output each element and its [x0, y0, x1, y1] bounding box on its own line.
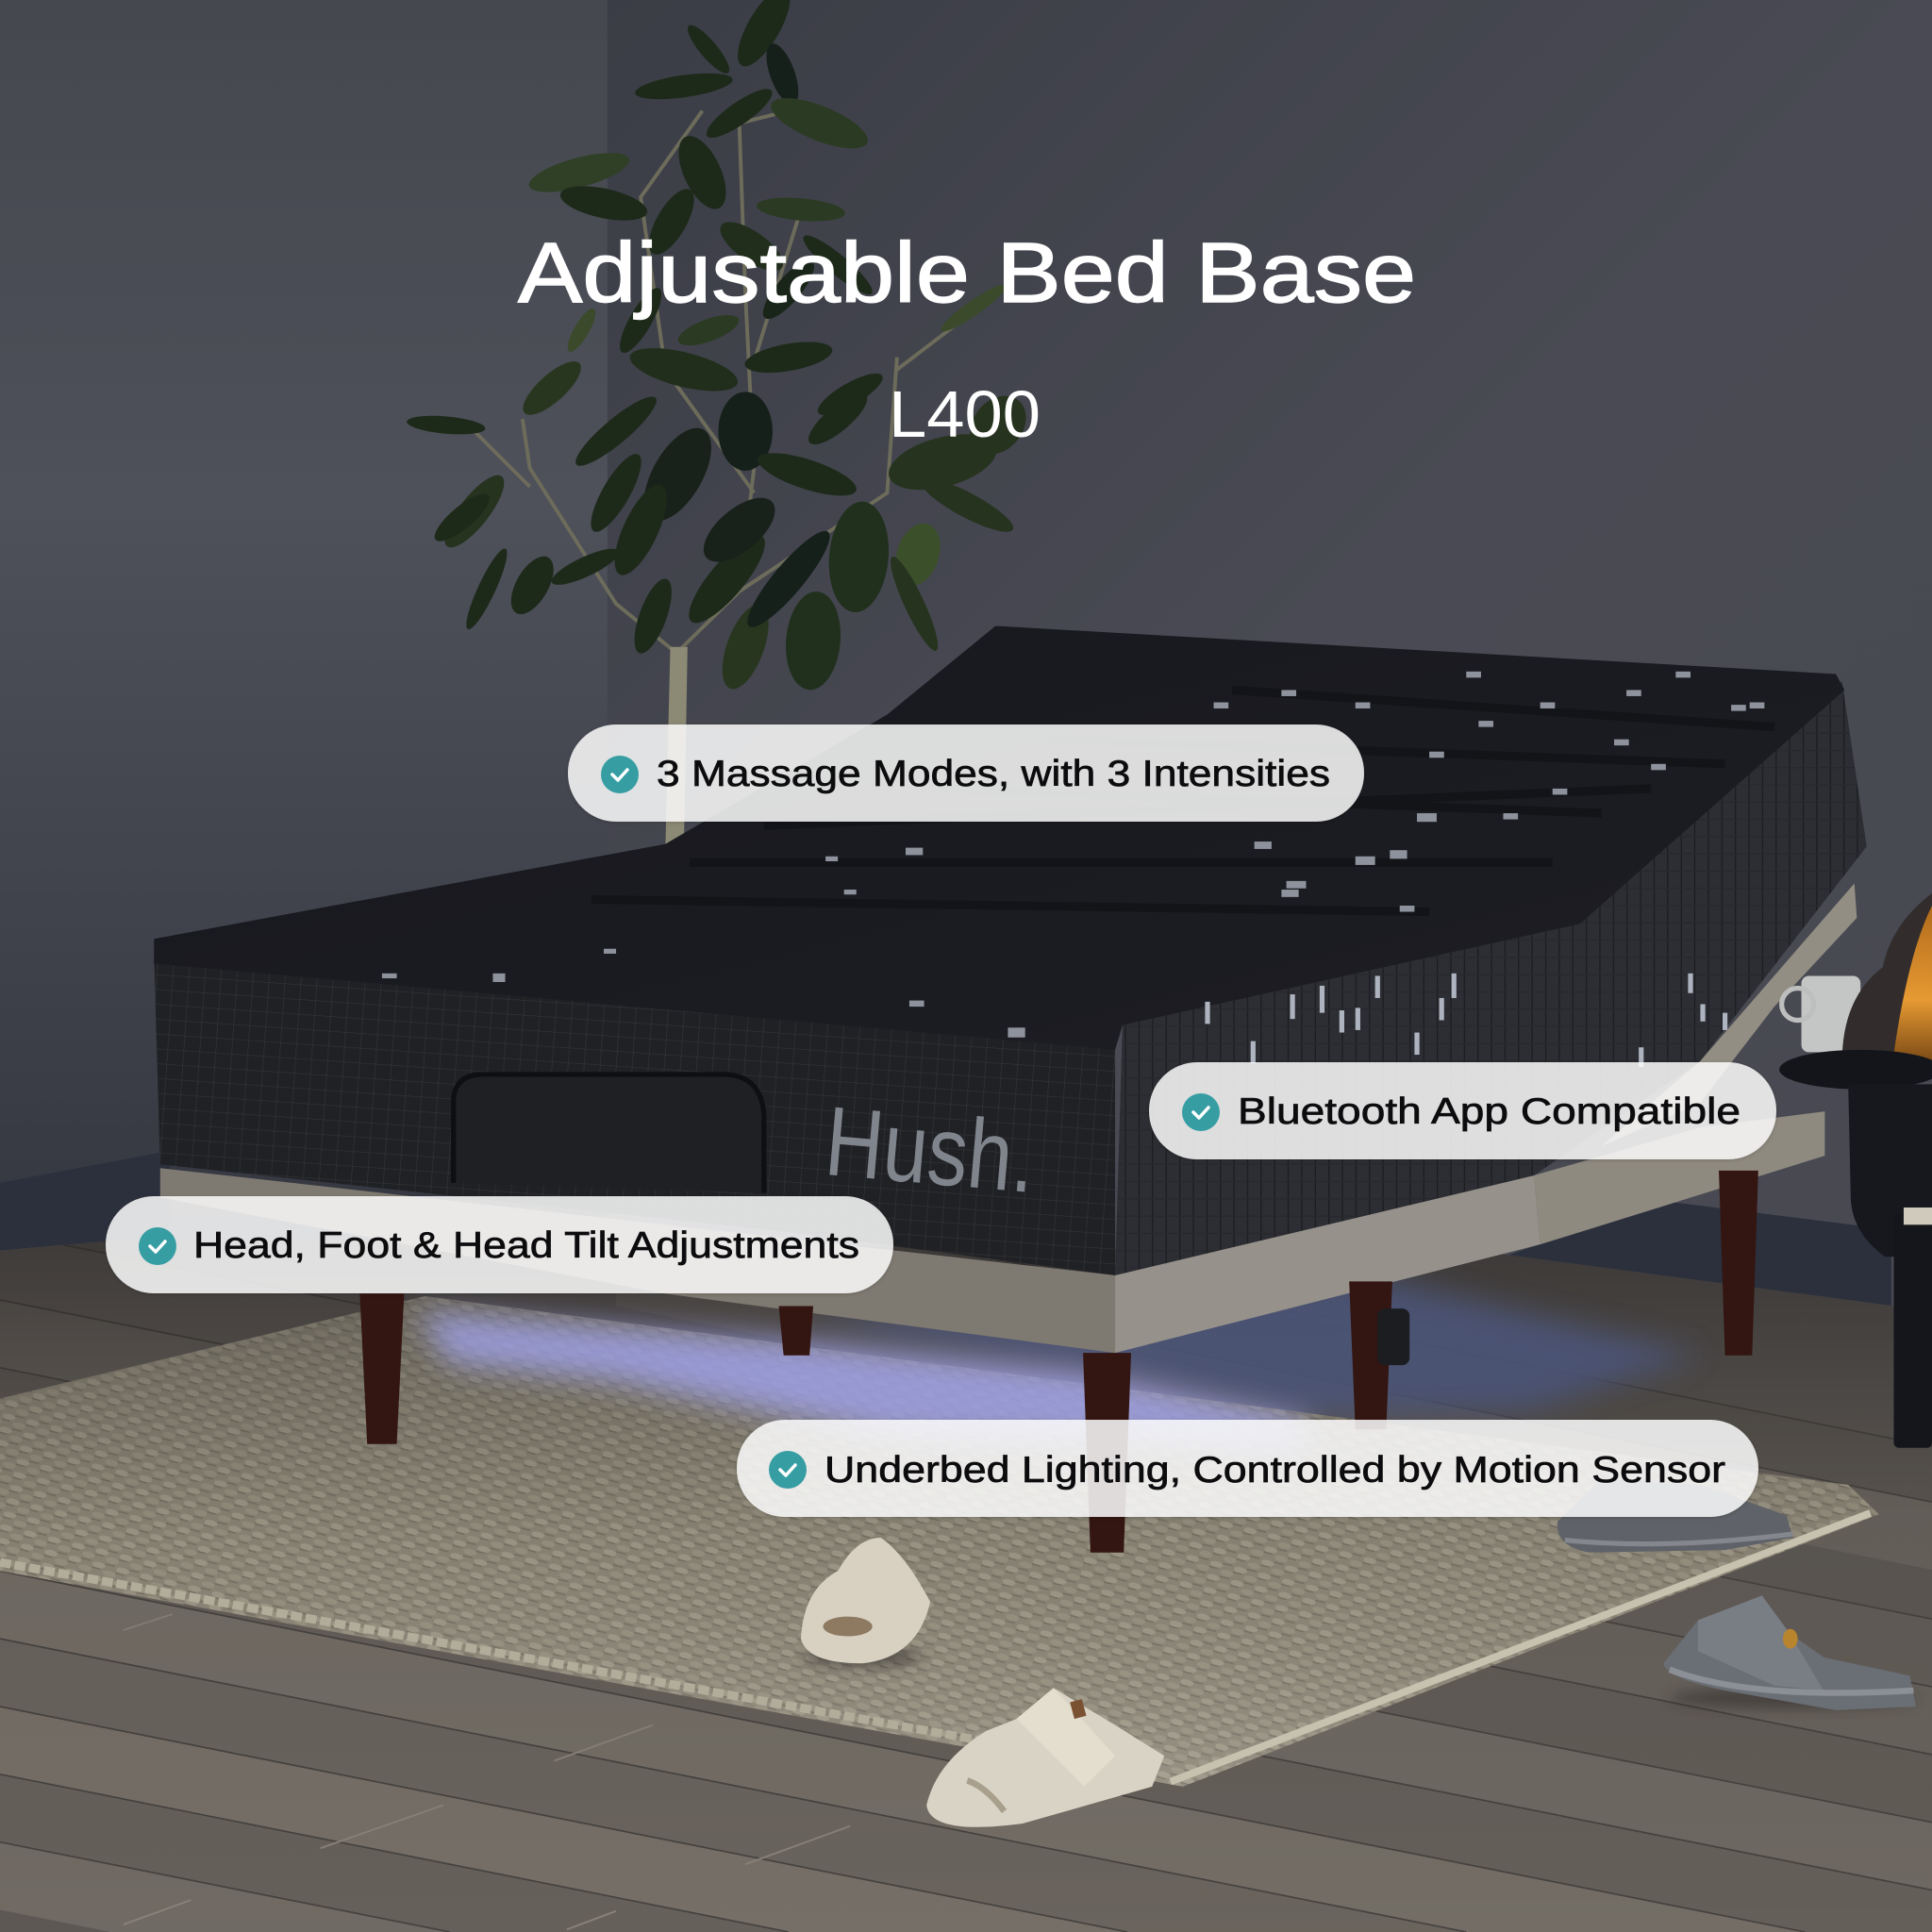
control flap: [454, 1074, 764, 1192]
slipper: white front: [926, 1688, 1164, 1827]
wall: left: [0, 367, 608, 1196]
pill: adjustments: [106, 1196, 893, 1293]
wood floor planks: [0, 1232, 1932, 1932]
top stripes: [591, 690, 1774, 912]
mug: [1802, 975, 1860, 1052]
pill: bluetooth: [1149, 1062, 1776, 1159]
slipper: grey under pill: [1557, 1478, 1792, 1553]
label: Underbed Lighting, Controlled by Motion Sensor: [824, 1450, 1725, 1491]
icon: check: [601, 756, 639, 793]
front face: [160, 1168, 1115, 1353]
slipper: white near: [801, 1538, 930, 1667]
lower wing: [1534, 1111, 1824, 1244]
underbed lighting glow: [419, 1313, 1306, 1448]
incline band: [1602, 883, 1857, 1146]
title: Adjustable Bed Base: [518, 226, 1416, 321]
rug: [0, 1296, 1879, 1787]
mattress: [154, 626, 1867, 1275]
lamp: [1842, 893, 1932, 1067]
mattress front face: [154, 955, 1115, 1275]
blue floor glow under bed: [801, 1275, 1700, 1417]
right face: [1115, 1175, 1541, 1353]
label: Head, Foot & Head Tilt Adjustments: [193, 1225, 859, 1266]
mattress side face: [1115, 681, 1867, 1275]
top dots: [382, 672, 1764, 1038]
bed legs: [359, 1171, 1758, 1553]
wall: right: [608, 0, 706, 96]
subtitle: L400: [889, 377, 1041, 451]
table: [1779, 1050, 1932, 1090]
plant main stem: [665, 647, 688, 850]
label: Bluetooth App Compatible: [1238, 1091, 1740, 1132]
leaves: [406, 0, 1038, 695]
mattress top face: [154, 626, 1844, 1050]
label: 3 Massage Modes, with 3 Intensities: [657, 754, 1330, 794]
bed base: [160, 883, 1857, 1353]
pill: lighting: [737, 1420, 1758, 1517]
icon: check: [769, 1451, 807, 1489]
side ticks: [1205, 974, 1727, 1067]
baseboard: [0, 1151, 1891, 1308]
icon: check: [139, 1227, 176, 1265]
pill: massage modes: [568, 724, 1364, 822]
plant: [406, 0, 1038, 850]
brand wordmark: Hush.: [821, 1086, 1040, 1214]
slipper: grey right: [1663, 1595, 1916, 1710]
side table, mug and lamp: [1779, 893, 1932, 1448]
icon: check: [1182, 1093, 1220, 1131]
plant branches: [468, 111, 986, 653]
